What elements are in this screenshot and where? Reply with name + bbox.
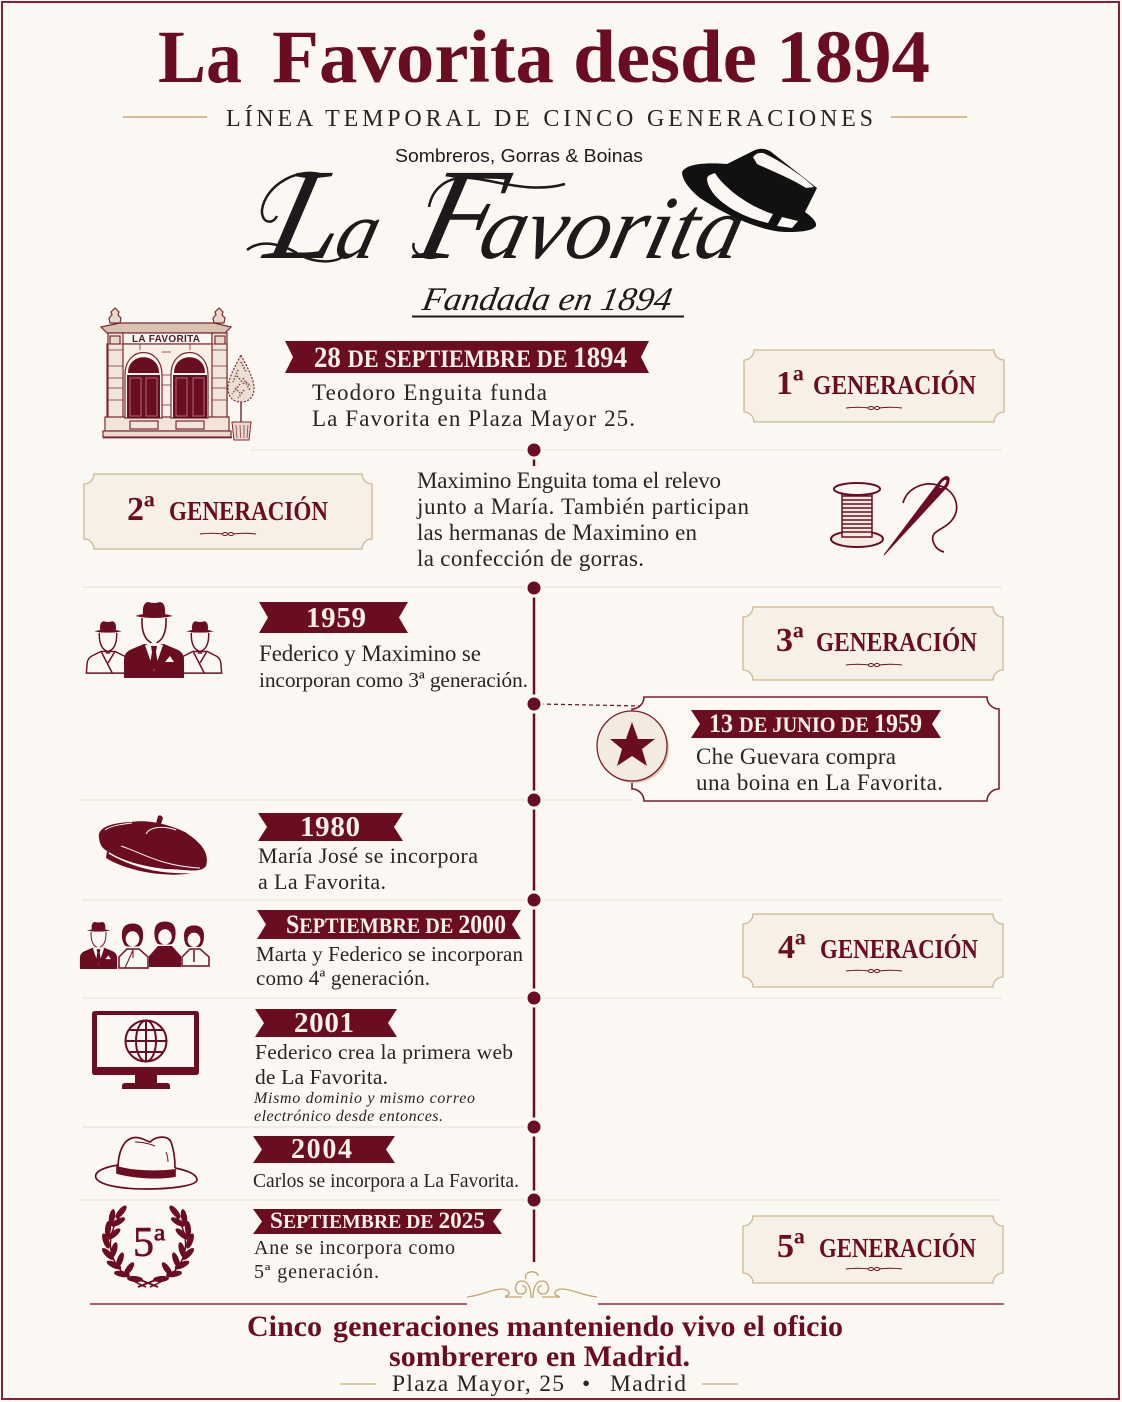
panel text: Che Guevara compra [696, 744, 896, 769]
generation badge 3: 3ª [776, 619, 804, 659]
ornament: closing flourish [467, 1272, 597, 1298]
generation badge 1: GENERACIÓN [813, 370, 976, 400]
event text [312, 380, 635, 431]
banner: date [285, 341, 649, 373]
banner date text: 28 DE SEPTIEMBRE DE 1894 [314, 341, 627, 374]
icon: straw hat [96, 1137, 197, 1189]
event: September 2025 [253, 1208, 502, 1283]
title: Favorita desde 1894 [272, 16, 930, 99]
logo script name: F [404, 142, 522, 287]
icon: family of four [80, 922, 209, 969]
generation badge 4: 4ª [778, 926, 806, 966]
event: September 2000: como 4ª generación. [256, 966, 430, 990]
closing statement: sombrerero en Madrid. [389, 1340, 690, 1373]
event: 2001: de La Favorita. [255, 1065, 388, 1089]
event: 1980 [258, 811, 478, 894]
event: 2004 [253, 1134, 519, 1192]
panel text [696, 744, 943, 795]
address line: Madrid [610, 1371, 686, 1397]
icon: monitor with globe [92, 1011, 199, 1089]
generation badge 1: 1ª [776, 362, 804, 402]
event text: incorporan como 3ª generación. [259, 668, 528, 692]
event: 1980: a La Favorita. [258, 869, 386, 894]
logo founded line: Fandada en 1894 [419, 281, 675, 318]
icon: shop facade [101, 308, 232, 438]
event: September 2000 [256, 910, 524, 990]
generation badge 1 [744, 350, 1004, 422]
address line: • [582, 1371, 590, 1397]
event text: La Favorita en Plaza Mayor 25. [312, 406, 635, 431]
event: September 2025: SEPTIEMBRE DE 2025 [270, 1208, 485, 1233]
icon: black fedora hat [682, 149, 817, 232]
icon: laurel wreath with 5ª [100, 1204, 196, 1287]
event: second generation text: junto a María. También participan [416, 494, 750, 519]
closing statement: Cinco [247, 1310, 322, 1343]
event: 1959: 1959 [306, 602, 366, 634]
banner: date [691, 710, 941, 738]
laurel leaves [100, 1204, 196, 1287]
event: second generation text: la confección de gorras. [417, 546, 644, 571]
logo script name: avorita [471, 178, 756, 278]
shop sign text: LA FAVORITA [132, 334, 200, 345]
panel: Che Guevara [597, 697, 999, 801]
icon: beret [99, 815, 207, 875]
event: 1894 founding [285, 341, 649, 431]
panel text: una boina en La Favorita. [696, 770, 943, 795]
logo script name: L [253, 142, 363, 287]
generation badge 5: 5ª [777, 1225, 805, 1265]
closing rule [90, 1303, 1004, 1305]
event: second generation text: Maximino Enguita toma el relevo [417, 468, 721, 493]
generation badge 5 [743, 1216, 1003, 1283]
generation badge 3 [743, 607, 1003, 680]
logo script name: a [327, 186, 391, 277]
event: 2004: 2004 [291, 1134, 352, 1165]
subtitle: LÍNEA TEMPORAL DE CINCO GENERACIONES [226, 106, 873, 132]
event: September 2025: 5ª generación. [254, 1261, 379, 1283]
event: September 2000: SEPTIEMBRE DE 2000 [286, 910, 506, 939]
event: 2001: 2001 [294, 1007, 354, 1039]
italic note [253, 1090, 475, 1125]
event text [259, 641, 528, 692]
event: September 2000: Marta y Federico se incorporan [256, 942, 524, 966]
generation badge 4: GENERACIÓN [820, 934, 978, 964]
generation badge 5: GENERACIÓN [819, 1233, 976, 1263]
event: 2001: Federico crea la primera web [255, 1040, 513, 1064]
event text: Federico y Maximino se [259, 641, 481, 666]
wreath number: 5ª [133, 1220, 165, 1266]
logo flourishes [247, 173, 565, 261]
icon: thread spool and needle [831, 477, 957, 555]
icon: star medallion [597, 711, 669, 783]
event text: Teodoro Enguita funda [312, 380, 547, 405]
icon: three men with hats [86, 602, 222, 678]
generation badge 2: GENERACIÓN [169, 496, 328, 526]
banner: 1959 [259, 602, 408, 633]
event: second generation text: las hermanas de Maximino en [417, 520, 698, 545]
italic note: electrónico desde entonces. [254, 1108, 443, 1125]
event: September 2025: Ane se incorpora como [254, 1237, 455, 1259]
timeline axis [526, 442, 642, 1262]
event: 2001 [253, 1007, 513, 1125]
address line: Plaza Mayor, 25 [392, 1371, 564, 1397]
event: second generation text [416, 468, 750, 571]
generation badge 2: 2ª [127, 488, 155, 528]
italic note: Mismo dominio y mismo correo [253, 1090, 475, 1107]
section dividers [82, 450, 1002, 1200]
closing statement: generaciones manteniendo vivo el oficio [333, 1310, 843, 1343]
title: La [158, 16, 242, 99]
event: 1980: 1980 [300, 811, 360, 843]
event: 1959 [259, 602, 528, 692]
generation badge 4 [743, 914, 1003, 987]
generation badge 3: GENERACIÓN [816, 627, 977, 657]
address line [340, 1371, 738, 1397]
logo: La Favorita [247, 142, 817, 318]
logo tagline: Sombreros, Gorras & Boinas [395, 145, 643, 166]
event: 1980: María José se incorpora [258, 843, 478, 868]
icon: potted tree [228, 355, 254, 440]
generation badge 2 [84, 474, 372, 549]
panel: Che Guevara: 13 DE JUNIO DE 1959 [709, 709, 922, 738]
event: 2004: Carlos se incorpora a La Favorita. [253, 1170, 519, 1192]
closing statement [247, 1310, 843, 1373]
